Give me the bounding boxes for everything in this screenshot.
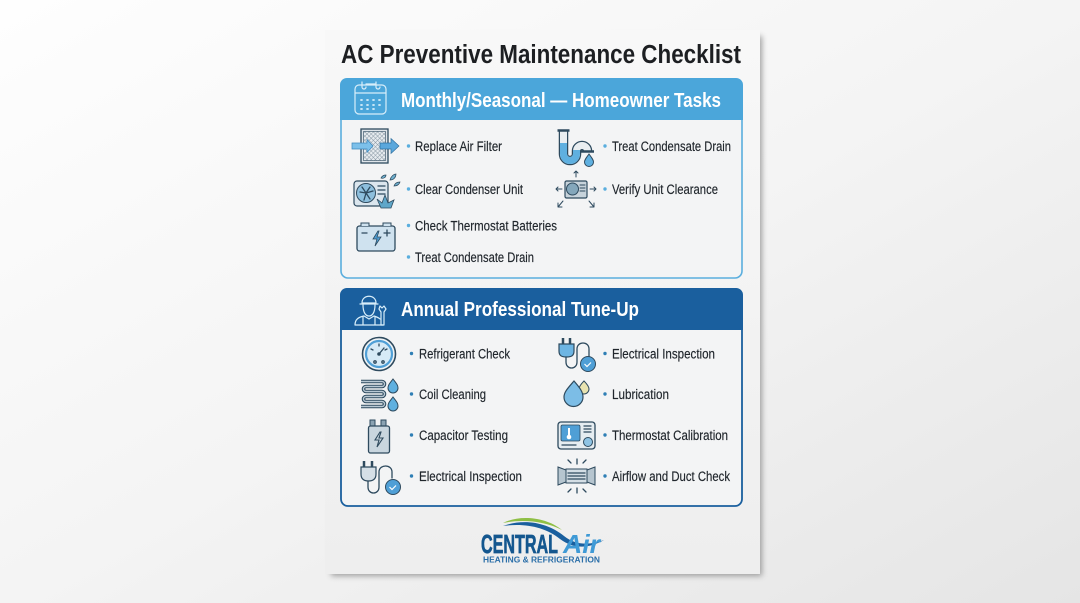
task: electrical inspection 2: Electrical Inspection [612, 346, 715, 362]
icon: battery [357, 223, 395, 251]
icon: lubrication drops [564, 381, 589, 406]
logo swoosh [503, 518, 562, 530]
icon: calendar [355, 82, 386, 114]
icon: technician [355, 296, 386, 325]
task: verify unit clearance: Verify Unit Clearance [612, 182, 718, 197]
icon: coil with drops [361, 379, 398, 411]
icon: thermostat [558, 422, 595, 449]
icon: airflow duct [558, 459, 595, 493]
task: treat condensate drain: Treat Condensate Drain [612, 139, 731, 154]
icon: unit clearance [556, 171, 596, 207]
logo tagline: HEATING & REFRIGERATION [483, 556, 600, 564]
panel header: annual [340, 288, 743, 330]
panel: homeowner tasks [340, 78, 743, 278]
icon: plug with check 2 [559, 338, 596, 372]
task: airflow and duct check: Airflow and Duct Check [612, 469, 730, 484]
task: thermostat calibration: Thermostat Calibration [612, 428, 728, 443]
icon: plug with check [361, 461, 400, 494]
task: clear condenser unit: Clear Condenser Unit [415, 182, 523, 197]
task: replace air filter: Replace Air Filter [415, 139, 502, 154]
task: treat condensate drain 2: Treat Condensate Drain [415, 250, 534, 265]
task: electrical inspection: Electrical Inspection [419, 469, 522, 484]
task: check thermostat batteries: Check Thermostat Batteries [415, 218, 557, 234]
icon: gauge [362, 338, 396, 370]
icon: condensate pipe [558, 130, 594, 166]
paper shadow [331, 36, 762, 576]
paper sheet [325, 30, 760, 574]
icon: air filter [352, 129, 399, 163]
icon: capacitor [368, 420, 390, 453]
task: lubrication: Lubrication [612, 387, 669, 402]
logo word CENTRAL: CENTRAL [481, 529, 558, 559]
task: refrigerant check: Refrigerant Check [419, 346, 510, 362]
heading: homeowner tasks: Monthly/Seasonal — Homeowner Tasks [401, 89, 721, 112]
task: capacitor testing: Capacitor Testing [419, 428, 508, 443]
heading: annual tune-up: Annual Professional Tune-Up [401, 298, 639, 321]
icon: condenser unit [354, 174, 400, 208]
logo: Central Air [481, 518, 604, 564]
panel header: homeowner [340, 78, 743, 120]
title: AC Preventive Maintenance Checklist [341, 41, 741, 69]
task: coil cleaning: Coil Cleaning [419, 387, 486, 402]
logo word Air: Air [562, 529, 602, 559]
panel: annual tune-up [340, 288, 743, 506]
